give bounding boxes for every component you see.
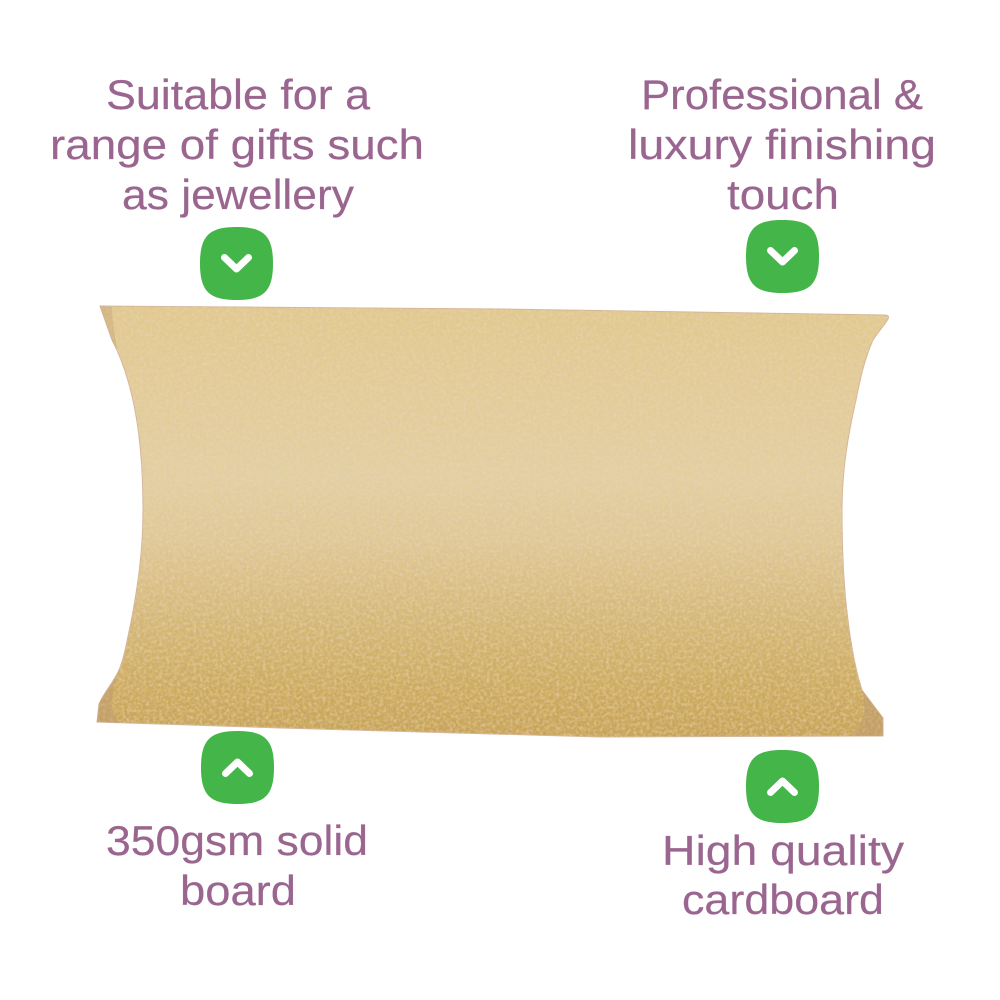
text: top right callout: Professional & [641, 71, 923, 118]
text: bottom left callout [106, 817, 368, 914]
text: bottom right callout [662, 827, 904, 923]
text: top left callout: range of gifts such [50, 121, 424, 168]
text: top right callout [628, 71, 936, 218]
icon: bottom left up chevron [201, 731, 274, 804]
text: bottom left callout: 350gsm solid [106, 817, 368, 864]
text: top left callout: Suitable for a [106, 71, 371, 118]
text: top right callout: luxury finishing [628, 121, 936, 168]
icon: top left down chevron [200, 227, 273, 300]
icon: bottom right up chevron [746, 750, 819, 823]
text: bottom left callout: board [180, 867, 296, 914]
icon: top right down chevron [746, 220, 819, 293]
pillow box [97, 306, 888, 737]
text: top left callout: as jewellery [122, 171, 354, 218]
text: top right callout: touch [727, 171, 839, 218]
text: bottom right callout: cardboard [682, 876, 884, 923]
text: top left callout [50, 71, 424, 218]
text: bottom right callout: High quality [662, 827, 904, 874]
